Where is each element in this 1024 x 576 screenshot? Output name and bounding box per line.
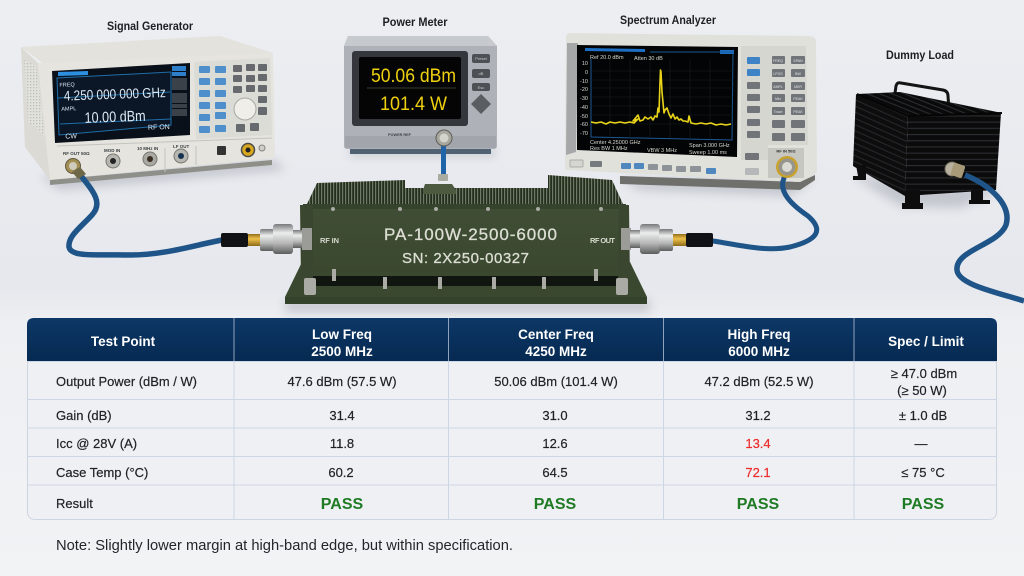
port labels: RF IN [320,236,339,245]
spectrum display: Center 4.25000 GHz [590,140,641,146]
instrument: power meter [344,36,497,154]
knob [234,98,256,120]
bottom soft keys [570,160,716,174]
low frequency column: 11.8 [330,436,354,451]
heading: Power Meter: Power Meter [382,15,448,29]
RF IN panel [768,148,804,178]
table header: High Freq [728,327,790,342]
spectrum display: Res BW 1 MHz [590,146,628,152]
table header: Center Freq [518,327,594,342]
cable: power meter to PA [441,143,446,174]
meter buttons [471,54,491,114]
row labels [56,374,197,511]
results table [27,318,997,520]
meter buttons: dB [479,71,484,76]
row labels: Case Temp (°C) [56,465,148,480]
analyzer keys: Mkr [775,97,782,101]
center frequency column: 64.5 [542,465,568,480]
table header: 2500 MHz [311,344,373,359]
screen: CW [65,133,77,141]
high frequency column: 13.4 [745,436,771,451]
analyzer keys: PEAK [793,97,803,101]
result row: PASS [902,496,945,513]
spectrum display: Sweep 1.00 ms [689,150,727,156]
connector: RF IN on PA [221,224,312,254]
spec column: — [914,436,928,451]
spec column: ≥ 47.0 dBm [891,366,957,381]
display: 50.06 dBm [371,66,456,87]
spectrum display: Atten 30 dB [634,56,663,62]
cable: analyzer to PA [713,178,817,249]
high frequency column: 72.1 [745,465,771,480]
table header: 6000 MHz [728,344,790,359]
analyzer keys: FREQ [773,59,783,63]
spectrum display: -40 [580,105,588,111]
low frequency column: 47.6 dBm (57.5 W) [287,374,397,389]
spectrum display: 10 [582,61,588,67]
high frequency column [704,374,814,480]
heading: Signal Generator: Signal Generator [107,19,193,33]
spectrum display: 0 [585,70,588,76]
spec column: ± 1.0 dB [899,408,947,423]
spectrum display [577,45,738,157]
instrument: power meter: POWER REF [388,133,412,137]
result row [321,496,945,513]
heading: Dummy Load: Dummy Load [886,48,954,62]
screen [52,63,190,143]
keypad [199,64,267,133]
spectrum display: -70 [580,131,588,137]
trace [591,70,731,125]
spectrum display: -20 [580,87,588,93]
floor shadows [40,148,1000,312]
screen: 10.00 dBm [84,108,146,127]
connector: dummy load [945,162,966,179]
high frequency column: 47.2 dBm (52.5 W) [704,374,814,389]
high frequency column: 31.2 [745,408,771,423]
connector: RF OUT on PA [621,224,713,254]
center frequency column: 12.6 [542,436,568,451]
feet [853,165,990,209]
connector: RF IN [776,156,798,178]
screen: RF ON [148,124,170,132]
port labels: RF OUT [590,236,615,245]
low frequency column: 60.2 [328,465,354,480]
RF IN panel: RF IN 50Ω [776,148,796,154]
low frequency column: 31.4 [329,408,355,423]
spectrum display: Ref 20.0 dBm [590,55,624,61]
center frequency column: 50.06 dBm (101.4 W) [494,374,618,389]
analyzer keys: SPAN [793,59,803,63]
display: 101.4 W [380,94,447,115]
analyzer keys: MKR [794,85,802,89]
spectrum display: -30 [580,96,588,102]
table header [27,318,997,361]
table header: 4250 MHz [525,344,587,359]
instrument: signal generator [21,36,275,185]
table header: Spec / Limit [888,334,964,349]
port labels [320,236,615,245]
power amplifier [285,175,647,304]
cable: load output [957,175,1024,301]
front connectors and labels: LF OUT [173,144,189,149]
front connectors and labels: 10 MHz IN [137,146,158,151]
result row: PASS [321,496,364,513]
base plate [285,262,647,304]
row labels: Output Power (dBm / W) [56,374,197,389]
model text: PA-100W-2500-6000 [384,225,557,244]
model text: SN: 2X250-00327 [402,250,529,267]
display [352,51,468,126]
analyzer keys: AMPL [773,85,783,89]
analyzer keys: PEAK [793,110,803,114]
row labels: Gain (dB) [56,408,112,423]
table header: Low Freq [312,327,372,342]
connector: RF OUT [66,158,86,179]
spec column: ≤ 75 °C [901,465,945,480]
spectrum display: -50 [580,114,588,120]
front connectors and labels: MOD IN [104,148,120,153]
analyzer keys: LPOS [773,72,783,76]
spectrum display: -10 [580,79,588,85]
spec column: (≥ 50 W) [897,383,947,398]
note: Note: Slightly lower margin at high-band edge, but within specification. [56,538,513,554]
instrument: spectrum analyzer [565,33,817,190]
handle [894,83,949,110]
screen: AMPL [61,106,76,113]
meter buttons: Preset [475,56,488,61]
table body [28,318,996,520]
screen: 4.250 000 000 GHz [64,84,166,104]
analyzer keys: Trace [774,110,782,114]
cable: generator to PA [69,172,222,255]
front connectors and labels: RF OUT 50Ω [63,151,90,156]
analyzer keys [745,56,805,175]
result row: PASS [737,496,780,513]
analyzer keys: BW [795,72,802,76]
center frequency column [494,374,618,480]
low frequency column [287,374,397,480]
spec column [891,366,957,480]
screws and standoffs [304,207,628,295]
heading: Spectrum Analyzer: Spectrum Analyzer [620,13,716,27]
spectrum display: VBW 3 MHz [647,148,677,154]
spectrum display: -60 [580,122,588,128]
heatsink [307,175,623,204]
connector: power meter [436,130,452,181]
row labels: Icc @ 28V (A) [56,436,137,451]
center frequency column: 31.0 [542,408,568,423]
meter buttons: Esc [478,85,484,90]
row labels: Result [56,496,93,511]
model text [384,225,557,267]
screen: FREQ [59,82,76,89]
result row: PASS [534,496,577,513]
table header: Test Point [91,334,156,349]
spectrum display: Span 3.000 GHz [689,143,730,149]
dummy load [853,83,1002,209]
front connectors and labels [63,144,265,168]
